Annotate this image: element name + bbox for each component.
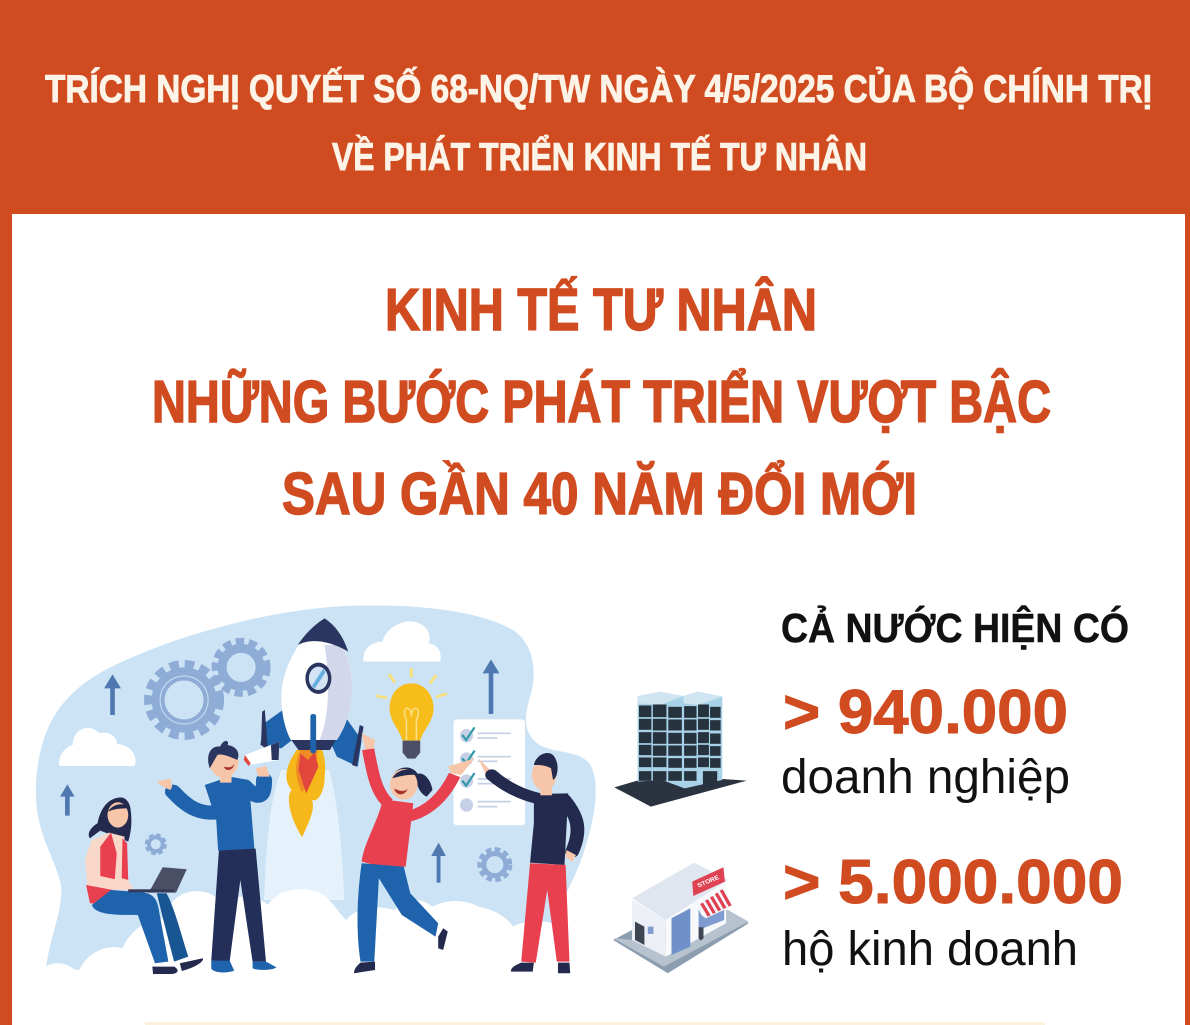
stats heading: CẢ NƯỚC HIỆN CÓ xyxy=(781,605,1129,651)
icon: office building xyxy=(614,692,747,807)
stat: enterprises label: doanh nghiệp xyxy=(781,751,1070,804)
gear small left xyxy=(147,836,164,853)
megaphone xyxy=(245,742,279,765)
stat: households number: > 5.000.000 xyxy=(783,848,1123,917)
rocket fins xyxy=(260,708,297,748)
clouds on sky xyxy=(59,621,441,766)
rocket body xyxy=(281,618,352,740)
bulb rays xyxy=(377,669,446,698)
person: woman with laptop xyxy=(85,797,203,974)
main title xyxy=(152,276,1051,527)
title line 1: KINH TẾ TƯ NHÂN xyxy=(385,276,817,343)
shop awning xyxy=(699,888,732,918)
light bulb xyxy=(377,669,446,759)
icon: shop xyxy=(613,863,749,973)
next section top edge xyxy=(145,1022,1045,1025)
person: man pointing xyxy=(478,753,577,973)
stat: households label: hộ kinh doanh xyxy=(782,923,1078,976)
statistics panel xyxy=(781,605,1129,976)
checklist paper xyxy=(453,719,525,825)
person: cheering woman xyxy=(354,733,475,973)
gear medium xyxy=(216,642,266,692)
rocket xyxy=(260,618,364,837)
laptop xyxy=(147,867,187,893)
person: man with megaphone xyxy=(157,741,279,972)
ground clouds xyxy=(44,889,574,973)
stat: enterprises number: > 940.000 xyxy=(783,678,1068,747)
rocket nozzle xyxy=(290,738,337,750)
rocket centre fin xyxy=(310,714,316,753)
shop sign: STORE xyxy=(696,874,720,889)
title line 3: SAU GẦN 40 NĂM ĐỔI MỚI xyxy=(282,461,917,527)
gear large xyxy=(150,666,218,734)
rocket flame xyxy=(286,750,325,837)
rocket exhaust beam xyxy=(264,770,344,900)
illustration: team launching a rocket xyxy=(36,605,596,974)
rocket nose xyxy=(298,618,348,652)
growth arrows xyxy=(60,659,499,883)
rocket window xyxy=(305,663,331,694)
gear small right xyxy=(480,850,510,880)
header line 2: VỀ PHÁT TRIỂN KINH TẾ TƯ NHÂN xyxy=(332,134,867,179)
background blob xyxy=(36,605,596,970)
header banner xyxy=(0,0,1190,214)
